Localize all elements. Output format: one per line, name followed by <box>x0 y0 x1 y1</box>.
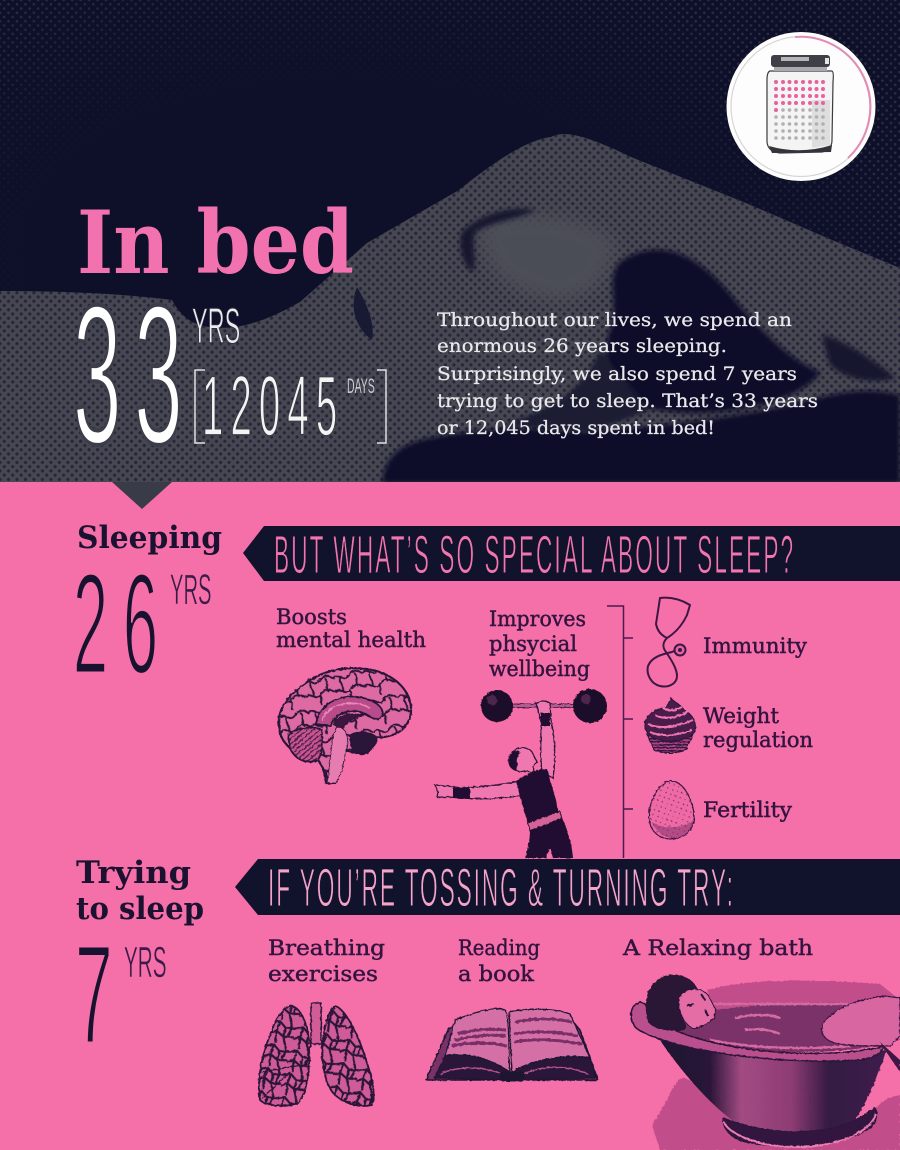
icon: lungs <box>259 1003 374 1106</box>
text: reading a book: a book <box>458 962 534 986</box>
text: boosts mental health: mental health <box>276 628 426 652</box>
outstretched arm <box>435 781 520 799</box>
intro paragraph: Surprisingly, we also spend 7 years <box>437 363 797 385</box>
icon: strongman with barbell <box>435 689 607 858</box>
title: In bed <box>77 191 354 294</box>
icon: cupcake <box>645 698 695 753</box>
text: reading a book: Reading <box>458 936 540 960</box>
panel: pink lower section <box>0 482 900 1150</box>
text: fertility: Fertility <box>703 798 792 822</box>
trying to sleep stat <box>75 855 204 1074</box>
text: weight regulation: regulation <box>703 728 813 752</box>
text: a relaxing bath: A Relaxing bath <box>622 936 813 960</box>
banner: tossing and turning <box>235 858 900 918</box>
sleeping stat <box>73 520 222 704</box>
arm and knee <box>822 996 900 1046</box>
intro paragraph: enormous 26 years sleeping. <box>437 335 727 357</box>
icon: brain <box>279 668 411 783</box>
tub body <box>660 1040 886 1132</box>
text: boosts mental health: Boosts <box>276 605 347 629</box>
text: breathing exercises: exercises <box>268 962 378 986</box>
text: improves physical wellbeing: Improves <box>489 607 586 631</box>
hair <box>646 974 698 1031</box>
label: YRS: YRS <box>124 939 167 987</box>
number: 12045: 12045 <box>202 358 344 453</box>
label: DAYS: DAYS <box>347 374 375 398</box>
text: improves physical wellbeing: phsycial <box>489 632 577 656</box>
text: improves physical wellbeing <box>489 607 590 681</box>
benefits bracket <box>607 606 633 858</box>
heading: trying to sleep: Trying <box>76 855 191 891</box>
text: immunity: Immunity <box>703 634 807 658</box>
rim <box>631 1002 884 1061</box>
face <box>679 989 716 1028</box>
banner: but what's so special: BUT WHAT’S SO SPECIAL ABOUT SLEEP? <box>274 525 793 585</box>
number: 7: 7 <box>75 917 113 1074</box>
water <box>650 1002 880 1052</box>
intro paragraph <box>437 309 818 439</box>
number: 33: 33 <box>73 266 195 486</box>
heading: trying to sleep: to sleep <box>76 891 204 927</box>
wall shadow <box>708 981 900 1040</box>
icon: stethoscope <box>648 598 690 687</box>
legs <box>525 818 573 858</box>
icon: jar of days in circle <box>726 32 876 181</box>
text: breathing exercises <box>268 936 385 986</box>
days bracket <box>195 370 386 443</box>
text: breathing exercises: Breathing <box>268 936 385 960</box>
icon: woman in bathtub <box>631 974 900 1150</box>
banner: tossing and turning: IF YOU’RE TOSSING & TURNING TRY: <box>268 858 733 918</box>
text: weight regulation: Weight <box>703 704 780 728</box>
icon: open book <box>426 1009 598 1081</box>
heading: Sleeping: Sleeping <box>77 520 222 556</box>
base <box>723 1108 877 1146</box>
text: weight regulation <box>703 704 813 752</box>
panel: photo header with halftone sleeper <box>0 0 900 483</box>
pointer notch <box>112 482 172 509</box>
number: 26: 26 <box>73 545 173 704</box>
text: boosts mental health <box>276 605 426 652</box>
belt <box>528 811 562 831</box>
icon: egg <box>649 781 694 839</box>
intro paragraph: or 12,045 days spent in bed! <box>437 417 715 439</box>
torso <box>516 769 558 825</box>
barbell <box>481 689 607 723</box>
intro paragraph: trying to get to sleep. That’s 33 years <box>437 390 818 412</box>
text: reading a book <box>458 936 540 986</box>
intro paragraph: Throughout our lives, we spend an <box>437 309 792 331</box>
total years stat <box>73 266 386 486</box>
label: YRS: YRS <box>170 567 212 614</box>
text: improves physical wellbeing: wellbeing <box>489 657 590 681</box>
floor <box>652 1077 900 1150</box>
heading: trying to sleep <box>76 855 204 927</box>
head <box>509 748 537 772</box>
raised arm <box>536 701 555 778</box>
label: YRS: YRS <box>192 299 240 355</box>
